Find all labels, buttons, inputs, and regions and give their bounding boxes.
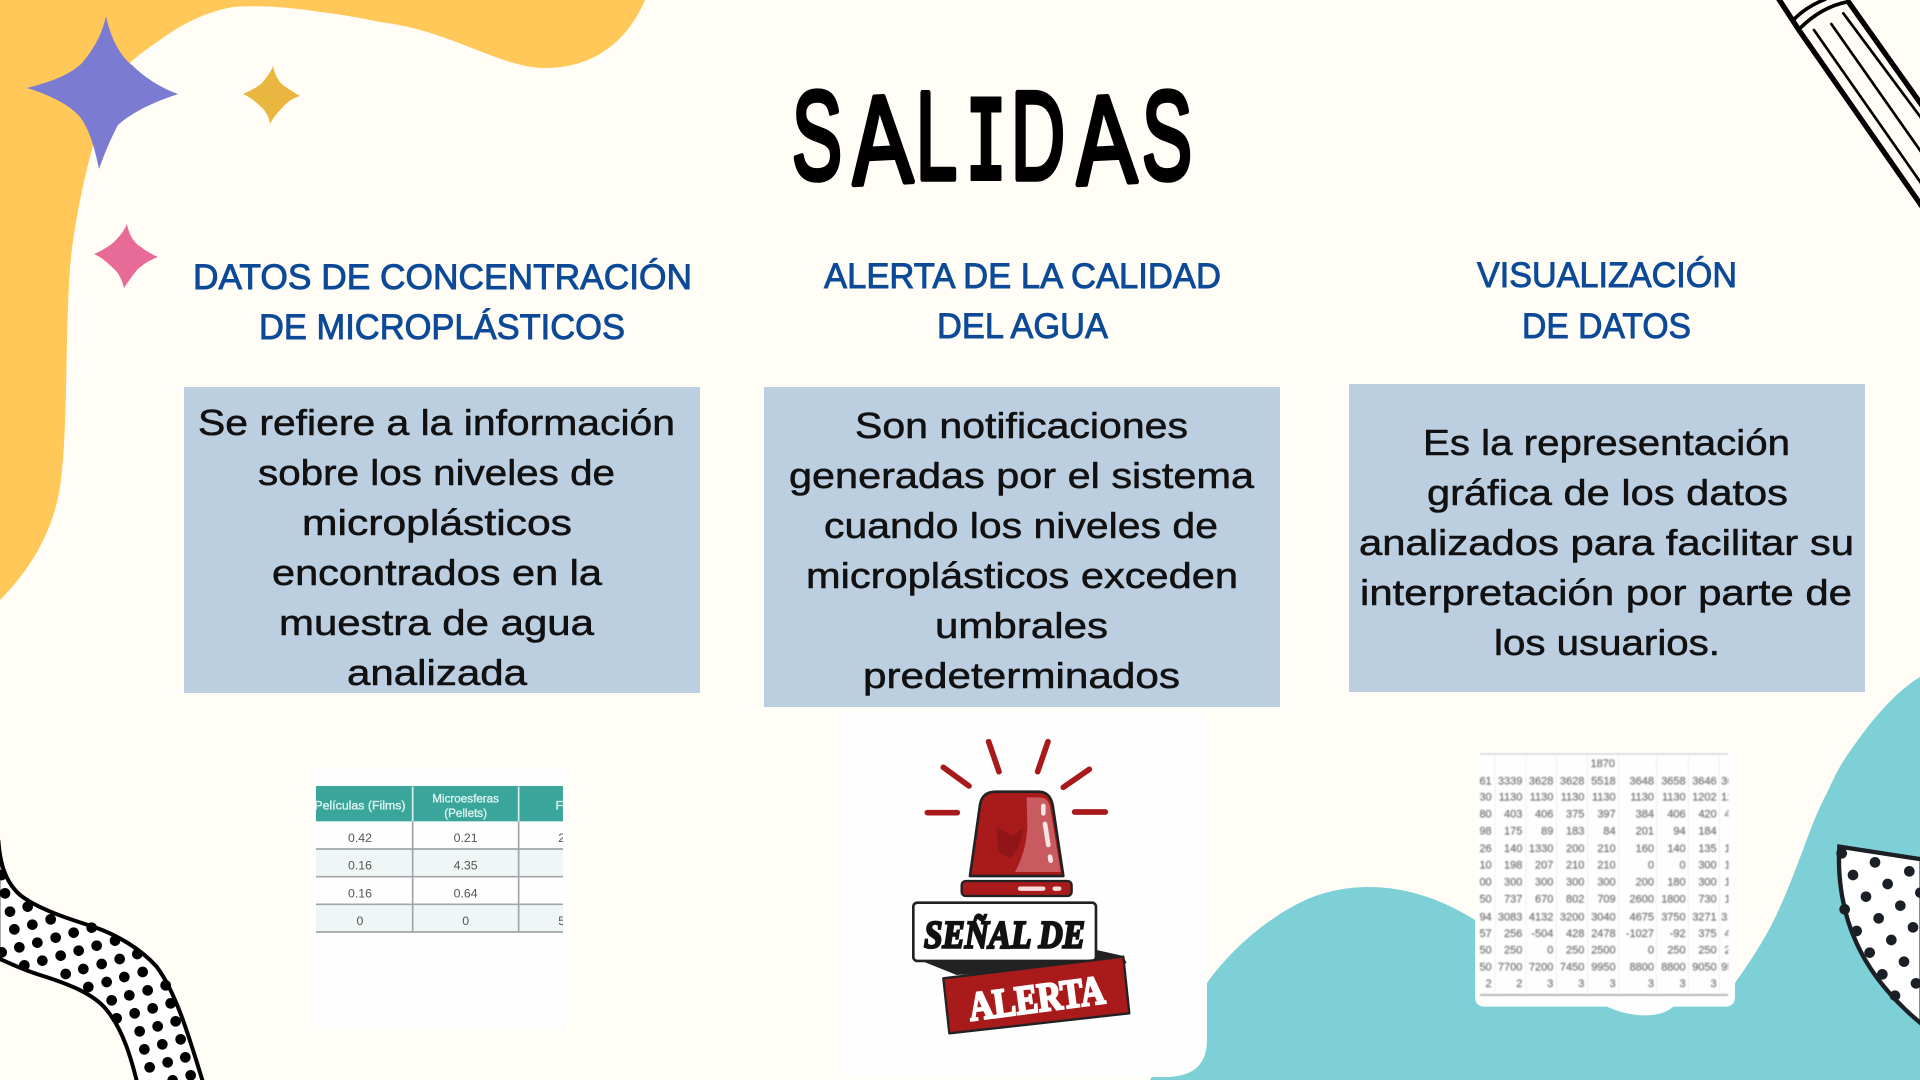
image: concentration table: 0.42 [348,831,372,845]
image: spreadsheet data: 3 [1547,978,1553,990]
image: spreadsheet data: 1130 [1662,791,1686,803]
image: spreadsheet data: 5518 [1591,775,1616,787]
heading: visualización [1477,256,1737,346]
description box 1: sobre los niveles de [258,452,615,493]
description box 3: analizados para facilitar su [1359,522,1854,563]
image: spreadsheet data: 1202 [1692,791,1717,803]
image: concentration table: Microesferas [432,793,499,806]
title: A [1071,70,1139,211]
image: spreadsheet data: 300 [1597,876,1616,888]
image: spreadsheet data: 10 [1479,860,1492,872]
image: spreadsheet data: 180 [1667,876,1686,888]
image: spreadsheet data: 31 [1721,911,1733,923]
panel: alerta de la calidad del agua [764,257,1280,707]
image: concentration table: 5 [558,914,565,928]
image: spreadsheet data: 207 [1535,860,1553,872]
description box 3: interpretación por parte de [1360,572,1852,613]
image: spreadsheet data: 250 [1566,945,1584,957]
image: spreadsheet data: 8800 [1630,961,1654,973]
image: spreadsheet data: 3750 [1661,911,1686,923]
image: señal de alerta card [839,712,1207,1077]
image: spreadsheet data: 160 [1636,843,1654,855]
image: spreadsheet data: 3658 [1661,775,1686,787]
heading: datos de concentración [193,258,692,347]
description box 2: umbrales [935,605,1108,646]
image: spreadsheet data: 98 [1479,825,1492,837]
image: spreadsheet data: 670 [1535,894,1553,906]
image: spreadsheet data: 200 [1636,876,1654,888]
image: concentration table: 0 [357,914,364,928]
image: spreadsheet data: 1130 [1499,791,1522,803]
image: spreadsheet data: 7700 [1498,961,1522,973]
heading: alerta: DEL AGUA [937,307,1109,346]
image: spreadsheet data: 57 [1479,928,1492,940]
image: spreadsheet data: 300 [1566,876,1584,888]
heading: alerta [824,257,1221,346]
image: spreadsheet data: 210 [1597,843,1616,855]
description box 3: los usuarios. [1494,622,1720,663]
image: spreadsheet data: 384 [1636,809,1654,821]
image: spreadsheet data: 2 [1516,978,1522,990]
image: spreadsheet data: 375 [1566,809,1584,821]
image: spreadsheet data: 256 [1504,928,1522,940]
image: spreadsheet data: 3271 [1692,911,1717,923]
heading: alerta: ALERTA DE LA CALIDAD [824,257,1221,296]
image: spreadsheet data: 3 [1610,978,1616,990]
image: spreadsheet data: 89 [1541,825,1553,837]
image: spreadsheet data: 3648 [1630,775,1654,787]
dotted squiggle bottom left [0,840,203,1080]
image: spreadsheet data: 420 [1698,809,1717,821]
description box 1: Se refiere a la información [198,402,675,443]
image: spreadsheet data: 210 [1566,860,1584,872]
description box 2 [764,387,1280,707]
image: spreadsheet data: 1330 [1529,843,1553,855]
icon: siren with alert sign: SEÑAL DE [924,912,1085,956]
image: spreadsheet data: 50 [1479,945,1492,957]
heading: visualización: DE DATOS [1522,307,1691,346]
icon: siren with alert sign: ALERTA [966,967,1108,1030]
star: purple [27,16,178,169]
star: pink [94,224,158,288]
image: spreadsheet data: 140 [1504,843,1522,855]
description box 1: muestra de agua [279,602,595,643]
description box 1 [184,387,700,693]
image: spreadsheet data: 2500 [1591,945,1616,957]
image: spreadsheet data: -504 [1531,928,1553,940]
image: spreadsheet data: 1 [1725,860,1731,872]
title: S [792,67,842,206]
image: spreadsheet data: 397 [1597,809,1616,821]
image: spreadsheet data: 3 [1680,978,1686,990]
image: concentration table: (Pellets) [444,807,487,820]
title: S [1142,67,1192,206]
panel: datos de concentración [184,258,700,693]
image: spreadsheet data: 135 [1698,843,1717,855]
image: spreadsheet data: 3 [1711,978,1717,990]
image: concentration table: 4.35 [454,859,478,873]
description box 2: generadas por el sistema [789,455,1255,496]
image: spreadsheet data: 84 [1603,825,1616,837]
image: spreadsheet data: 50 [1479,894,1492,906]
image: spreadsheet data: 183 [1566,825,1584,837]
image: spreadsheet data: 250 [1504,945,1522,957]
title [792,67,1192,218]
image: spreadsheet data: 198 [1504,860,1522,872]
image: concentration table: Películas (Films) [314,799,406,813]
image: spreadsheet data: 0 [1648,945,1654,957]
image: spreadsheet data: 4 [1725,928,1731,940]
teal background blob [1150,677,1920,1080]
description box 2: microplásticos exceden [806,555,1238,596]
image: spreadsheet data: 4 [1725,809,1731,821]
image: spreadsheet data: 3339 [1498,775,1522,787]
title: D [1011,67,1065,206]
image: spreadsheet data: 0 [1547,945,1553,957]
description box 1: analizada [347,652,528,693]
image: concentration table [316,786,563,933]
image: spreadsheet data: 30 [1479,791,1492,803]
image: spreadsheet data: -1027 [1626,928,1654,940]
star: yellow [243,66,300,124]
image: spreadsheet data: 406 [1667,809,1686,821]
image: spreadsheet data: 1 [1725,894,1731,906]
image: spreadsheet data: 737 [1504,894,1522,906]
image: spreadsheet data: 2600 [1630,894,1654,906]
image: spreadsheet data: 250 [1698,945,1717,957]
image: spreadsheet data: 4132 [1529,911,1553,923]
image: concentration table: 0 [462,914,469,928]
image: spreadsheet data: 36 [1721,775,1733,787]
image: spreadsheet data: 2478 [1591,928,1616,940]
image: spreadsheet data: 0 [1680,860,1686,872]
image: spreadsheet data: 3040 [1591,911,1616,923]
image: spreadsheet data [1475,752,1735,1015]
pencil illustration [1778,0,1920,206]
image: spreadsheet data: 0 [1648,860,1654,872]
image: spreadsheet data: 80 [1479,809,1492,821]
image: spreadsheet data: 9950 [1591,961,1616,973]
image: spreadsheet data: 403 [1504,809,1522,821]
image: concentration table: 0.21 [454,831,478,845]
image: spreadsheet data: 7200 [1529,961,1553,973]
image: spreadsheet data: 3628 [1529,775,1553,787]
image: spreadsheet data: 175 [1504,825,1522,837]
description box 1: encontrados en la [272,552,603,593]
image: spreadsheet data: 3083 [1498,911,1522,923]
image: spreadsheet data: 9050 [1692,961,1717,973]
image: spreadsheet data: 12 [1721,791,1733,803]
image: spreadsheet data: 26 [1479,843,1492,855]
image: spreadsheet data: 1870 [1591,758,1615,770]
image: spreadsheet data: 3 [1578,978,1584,990]
image: spreadsheet data: 300 [1535,876,1553,888]
description box 3: Es la representación [1423,422,1790,463]
image: concentration table: Fi [555,799,566,813]
image: spreadsheet data: 8800 [1661,961,1686,973]
title: A [847,70,915,211]
image: spreadsheet data: 3628 [1560,775,1584,787]
image: spreadsheet data: 1130 [1630,791,1654,803]
image: spreadsheet data: 1800 [1661,894,1686,906]
image: spreadsheet data: 1130 [1592,791,1616,803]
image: concentration table: 0.16 [348,859,372,873]
image: spreadsheet data: 1130 [1561,791,1584,803]
description box 2: predeterminados [863,655,1180,696]
image: spreadsheet data: 250 [1667,945,1686,957]
image: concentration table: 0.16 [348,886,372,900]
image: spreadsheet data: 1 [1725,843,1731,855]
image: spreadsheet data: 3646 [1692,775,1717,787]
image: spreadsheet data: 802 [1566,894,1584,906]
panel: visualización de datos [1349,256,1865,692]
icon: siren with alert sign [913,742,1129,1033]
image: spreadsheet data: 200 [1566,843,1584,855]
image: spreadsheet data: 2 [1725,945,1731,957]
heading: datos de concentración: DATOS DE CONCENTRACIÓN [193,258,692,297]
image: spreadsheet data: 00 [1479,876,1492,888]
image: spreadsheet data: 730 [1698,894,1717,906]
heading: visualización: VISUALIZACIÓN [1477,256,1737,295]
image: spreadsheet data: 300 [1698,860,1717,872]
title: L [916,67,957,206]
image: spreadsheet data: 1 [1725,876,1731,888]
image: spreadsheet data: -92 [1670,928,1686,940]
image: spreadsheet data: 140 [1667,843,1686,855]
image: spreadsheet data: 50 [1479,961,1492,973]
image: spreadsheet data: 300 [1698,876,1717,888]
image: spreadsheet data: 7450 [1560,961,1584,973]
image: spreadsheet data: 61 [1479,775,1492,787]
image: spreadsheet data: 184 [1698,825,1717,837]
description box 1: microplásticos [302,502,572,543]
image: spreadsheet data: 3 [1648,978,1654,990]
image: spreadsheet data: 406 [1535,809,1553,821]
yellow background blob [0,0,645,600]
image: spreadsheet data: 428 [1566,928,1584,940]
image: spreadsheet data: 300 [1504,876,1522,888]
image: spreadsheet data: 1130 [1530,791,1553,803]
dotted half shape bottom right [1836,847,1920,1024]
image: concentration table: 2 [558,831,565,845]
title: I [966,76,1006,218]
description box 2: cuando los niveles de [824,505,1218,546]
description box 3 [1349,384,1865,692]
image: spreadsheet data: 4675 [1630,911,1654,923]
image: spreadsheet data: 2 [1486,978,1492,990]
description box 3: gráfica de los datos [1427,472,1788,513]
image: spreadsheet data: 375 [1698,928,1717,940]
image: spreadsheet data: 94 [1479,911,1492,923]
image: concentration table: 0.64 [454,886,478,900]
description box 2: Son notificaciones [855,405,1188,446]
image: spreadsheet data: 3200 [1560,911,1584,923]
heading: datos de concentración: DE MICROPLÁSTICOS [259,308,625,347]
image: spreadsheet data: 201 [1636,825,1654,837]
image: spreadsheet data: 95 [1721,961,1733,973]
image: spreadsheet data: 94 [1673,825,1686,837]
image: spreadsheet data: 210 [1597,860,1616,872]
image: spreadsheet data: 709 [1597,894,1616,906]
